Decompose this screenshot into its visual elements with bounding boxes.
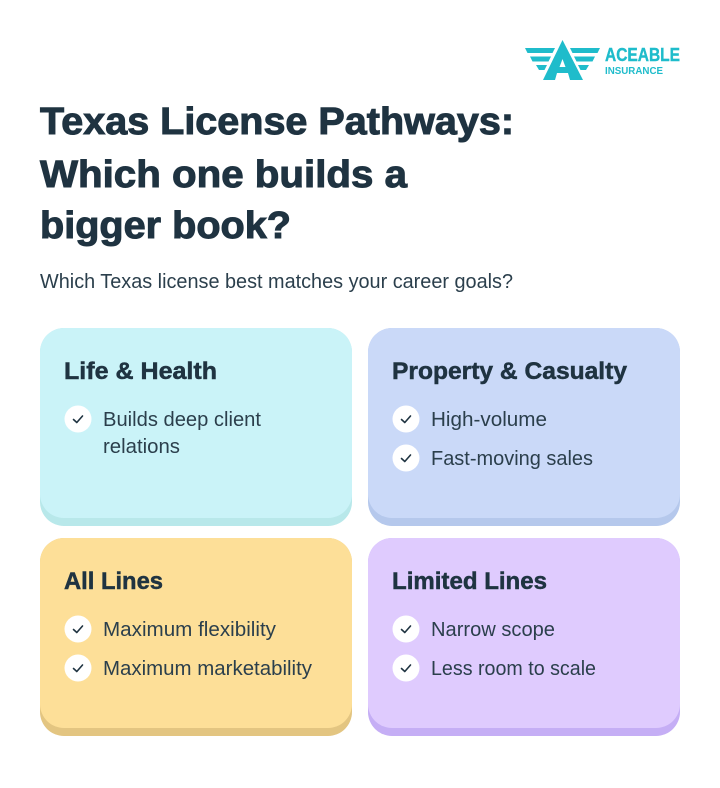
item: Maximum flexibility — [64, 616, 276, 642]
item: Maximum flexibility: Maximum flexibility — [103, 619, 276, 641]
logo: Aceable Insurance — [525, 40, 680, 80]
heading: Property & Casualty: Property & Casualty — [392, 358, 628, 385]
item: Builds deep client relations — [64, 406, 261, 458]
heading: Limited Lines: Limited Lines — [392, 568, 547, 595]
item: Builds deep client relations: Builds deep client — [103, 409, 261, 431]
item: Fast-moving sales: Fast-moving sales — [431, 448, 593, 470]
title — [40, 101, 514, 247]
panel: Life & Health — [40, 328, 352, 526]
heading: All Lines: All Lines — [64, 568, 163, 595]
item: Narrow scope — [392, 616, 555, 642]
title: Which one builds a — [40, 154, 408, 196]
item: High-volume: High-volume — [431, 409, 547, 431]
item: Less room to scale — [392, 654, 596, 682]
title: bigger book? — [40, 205, 291, 247]
item: Maximum marketability: Maximum marketability — [103, 658, 312, 680]
panel: Property & Casualty — [368, 328, 680, 526]
item: Builds deep client relations: relations — [103, 436, 180, 458]
item: Less room to scale: Less room to scale — [431, 658, 596, 680]
item: High-volume — [392, 406, 547, 432]
item: Narrow scope: Narrow scope — [431, 619, 555, 641]
panel: All Lines — [40, 538, 352, 736]
item: Fast-moving sales — [392, 444, 593, 472]
subtitle: Which Texas license best matches your career goals? — [40, 271, 513, 293]
item: Maximum marketability — [64, 654, 312, 682]
title: Texas License Pathways: — [40, 101, 514, 143]
heading: Life & Health: Life & Health — [64, 358, 217, 385]
logo: Aceable Insurance: ACEABLE — [605, 45, 680, 65]
logo: Aceable Insurance: INSURANCE — [605, 66, 663, 77]
panel: Limited Lines — [368, 538, 680, 736]
